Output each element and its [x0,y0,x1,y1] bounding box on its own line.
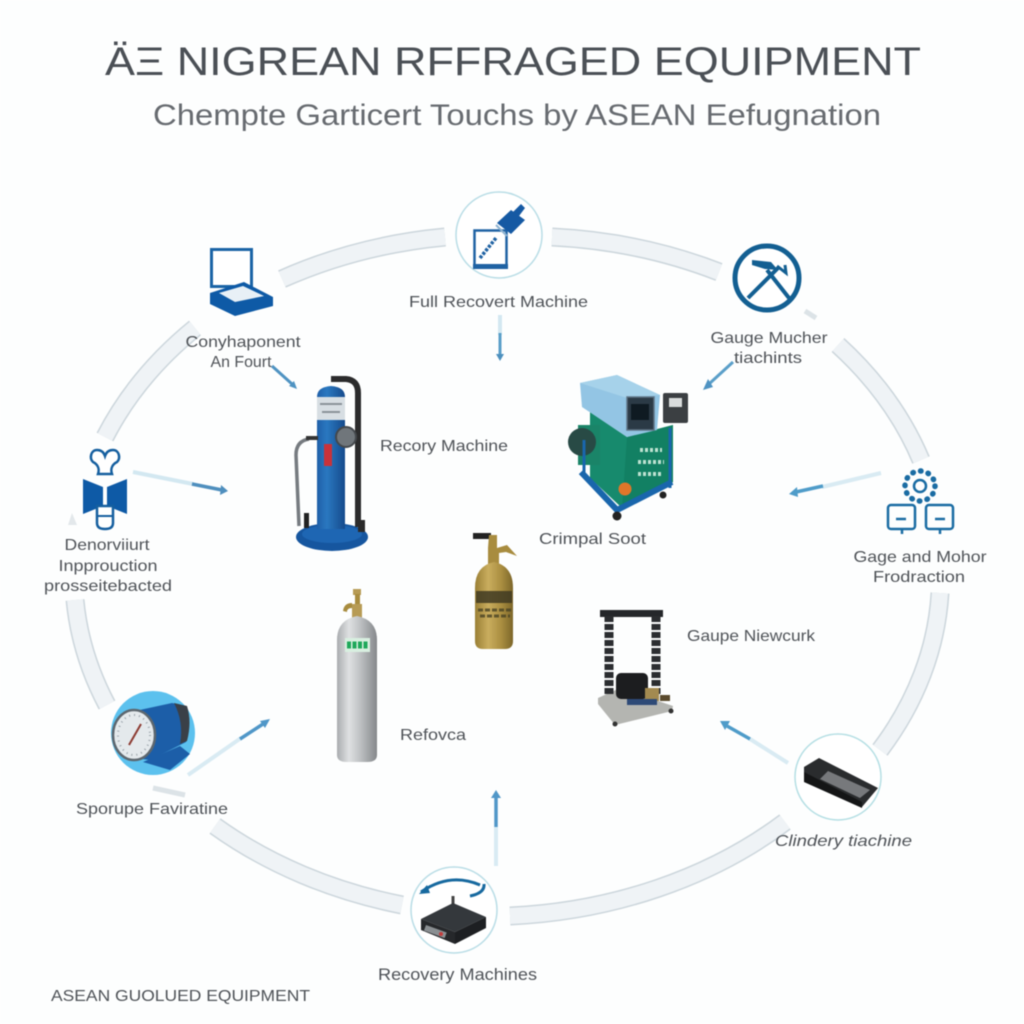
icon: black device [795,734,881,820]
footer: ASEAN GUOLUED EQUIPMENT [51,988,310,1005]
label: green machine: Crimpal Soot [539,531,647,548]
label: gear node: Frodraction [873,569,965,586]
arrow: upper right [703,362,733,390]
label: valve node: prosseitebacted [44,578,172,595]
icon: crossed tools in circle [735,246,799,310]
label: black device node: Clindery tiachine [775,833,912,850]
subtitle: Chempte Garticert Touchs by ASEAN Eefugnation [153,99,881,132]
equipment: gold bottle [473,533,517,649]
arrow: upper left [272,366,297,389]
circular ring [75,237,940,916]
equipment: silver cylinder [337,589,377,762]
label: tools node [710,330,828,367]
equipment: blue recovery cylinder [296,379,368,551]
label: laptop node [186,334,301,371]
label: top node: Full Recovert Machine [409,294,588,311]
arrow: bottom [491,790,501,866]
icon: wand in circle [456,192,542,278]
equipment: green and blue recovery machine [568,375,688,520]
title: ÄΞ NIGREAN RFFRAGED EQUIPMENT [105,40,921,84]
equipment: black rack [598,610,674,726]
arrow: gauge [188,719,270,775]
label: recovery cylinder: Recory Machine [380,438,508,455]
label: laptop node: Conyhaponent [186,334,301,351]
label: silver cylinder: Refovca [400,727,466,744]
label: black rack: Gaupe Niewcurk [687,628,816,645]
arrow: left [133,472,228,495]
icon: gear and screens [888,471,953,534]
label: valve node: Denorviiurt [64,537,150,554]
icon: valve and tube [68,450,127,529]
arrows [133,315,881,866]
icon: recovery box [411,867,497,953]
label: valve node: Inpprouction [58,558,158,575]
arrow: right [789,473,881,497]
label: gear node: Gage and Mohor [854,549,987,566]
label: tools node: tiachints [734,350,802,367]
label: tools node: Gauge Mucher [710,330,828,347]
label: gauge node: Sporupe Faviratine [76,801,228,818]
icon: pressure gauge [111,691,195,775]
label: gear node [854,549,987,586]
label: recovery box node: Recovery Machines [378,966,537,984]
arrow: top [496,315,504,361]
arrow: lower right [720,721,788,763]
label: valve node [44,537,172,595]
icon: laptop [210,250,273,316]
label: laptop node: An Fourt [210,354,272,371]
